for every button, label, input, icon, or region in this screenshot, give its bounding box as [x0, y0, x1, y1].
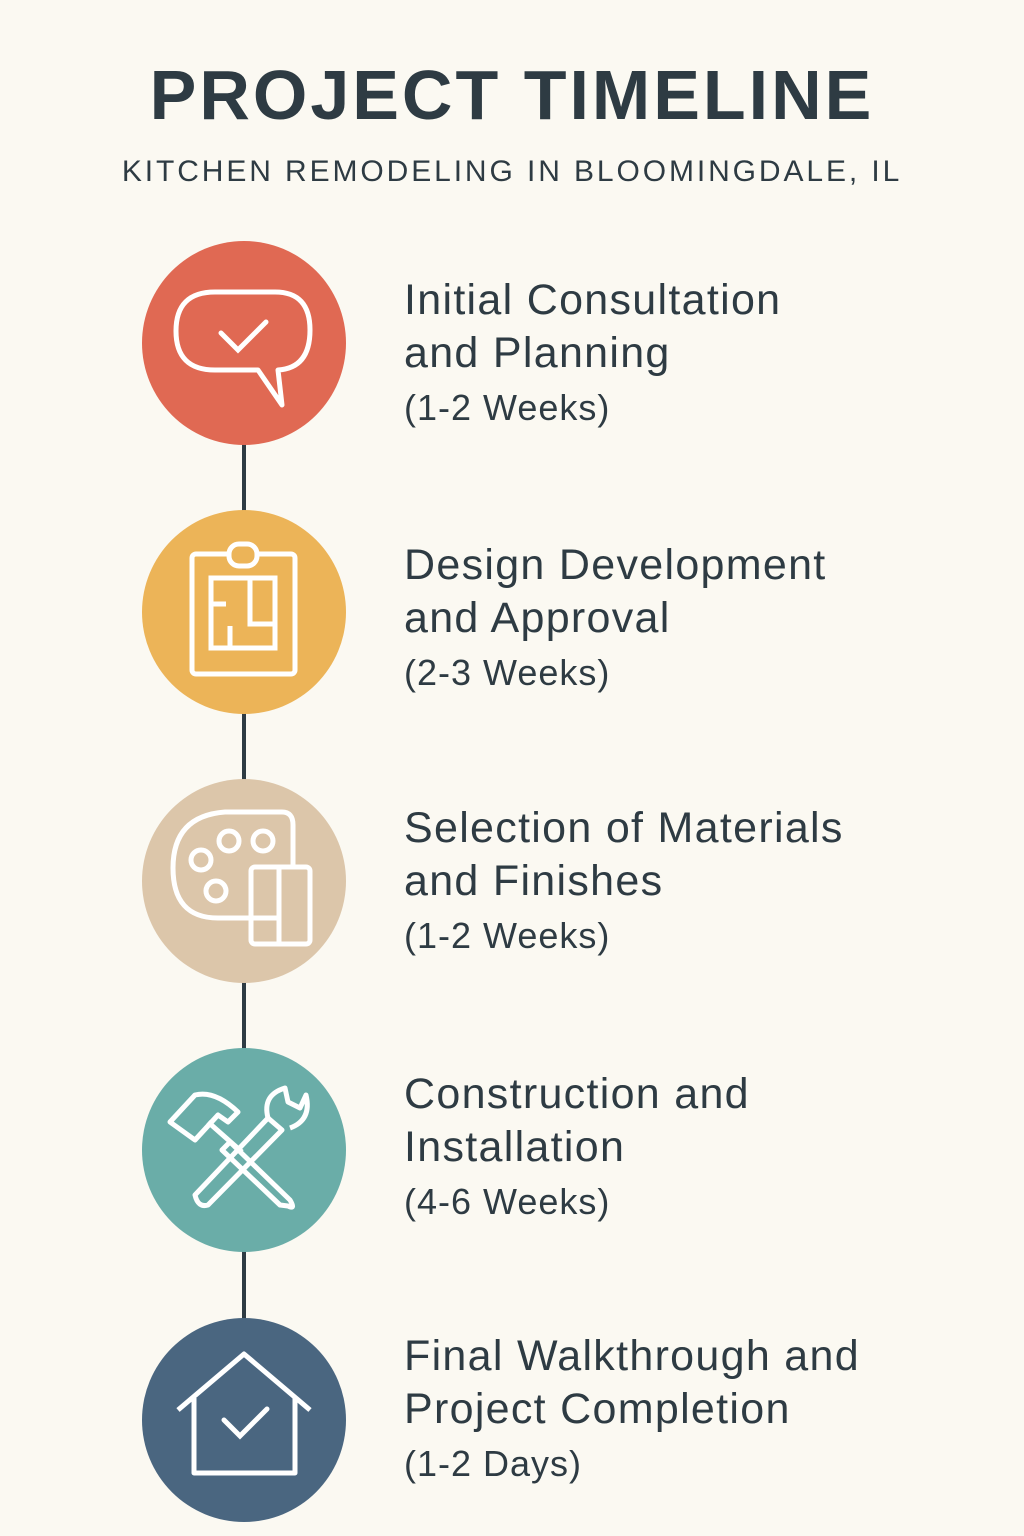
step 4 text: (4-6 Weeks) [404, 1181, 610, 1222]
step 1 text: Initial Consultation [404, 276, 781, 324]
step 5 text: (1-2 Days) [404, 1443, 582, 1484]
step 3 text: (1-2 Weeks) [404, 915, 610, 956]
step 5 text: Project Completion [404, 1385, 791, 1433]
icon: materials palette [142, 779, 346, 983]
icon: consultation [142, 241, 346, 445]
title: PROJECT TIMELINE [150, 56, 874, 134]
icon: design clipboard [142, 510, 346, 714]
step 4 text: Construction and [404, 1070, 750, 1118]
step 4 text [404, 1070, 750, 1222]
step 4 text: Installation [404, 1123, 625, 1171]
step 2 text: Design Development [404, 541, 827, 589]
step 5 text [404, 1332, 860, 1484]
step 1 text: (1-2 Weeks) [404, 387, 610, 428]
step 2 text [404, 541, 827, 693]
step 2 text: and Approval [404, 594, 671, 642]
step 1 text [404, 276, 781, 428]
step 2 text: (2-3 Weeks) [404, 652, 610, 693]
icon: house [142, 1318, 346, 1522]
icon: tools [142, 1048, 346, 1252]
step 3 text [404, 804, 844, 956]
subtitle: KITCHEN REMODELING IN BLOOMINGDALE, IL [122, 155, 902, 188]
step 3 text: and Finishes [404, 857, 663, 905]
step 5 text: Final Walkthrough and [404, 1332, 860, 1380]
step 1 text: and Planning [404, 329, 671, 377]
step 3 text: Selection of Materials [404, 804, 844, 852]
